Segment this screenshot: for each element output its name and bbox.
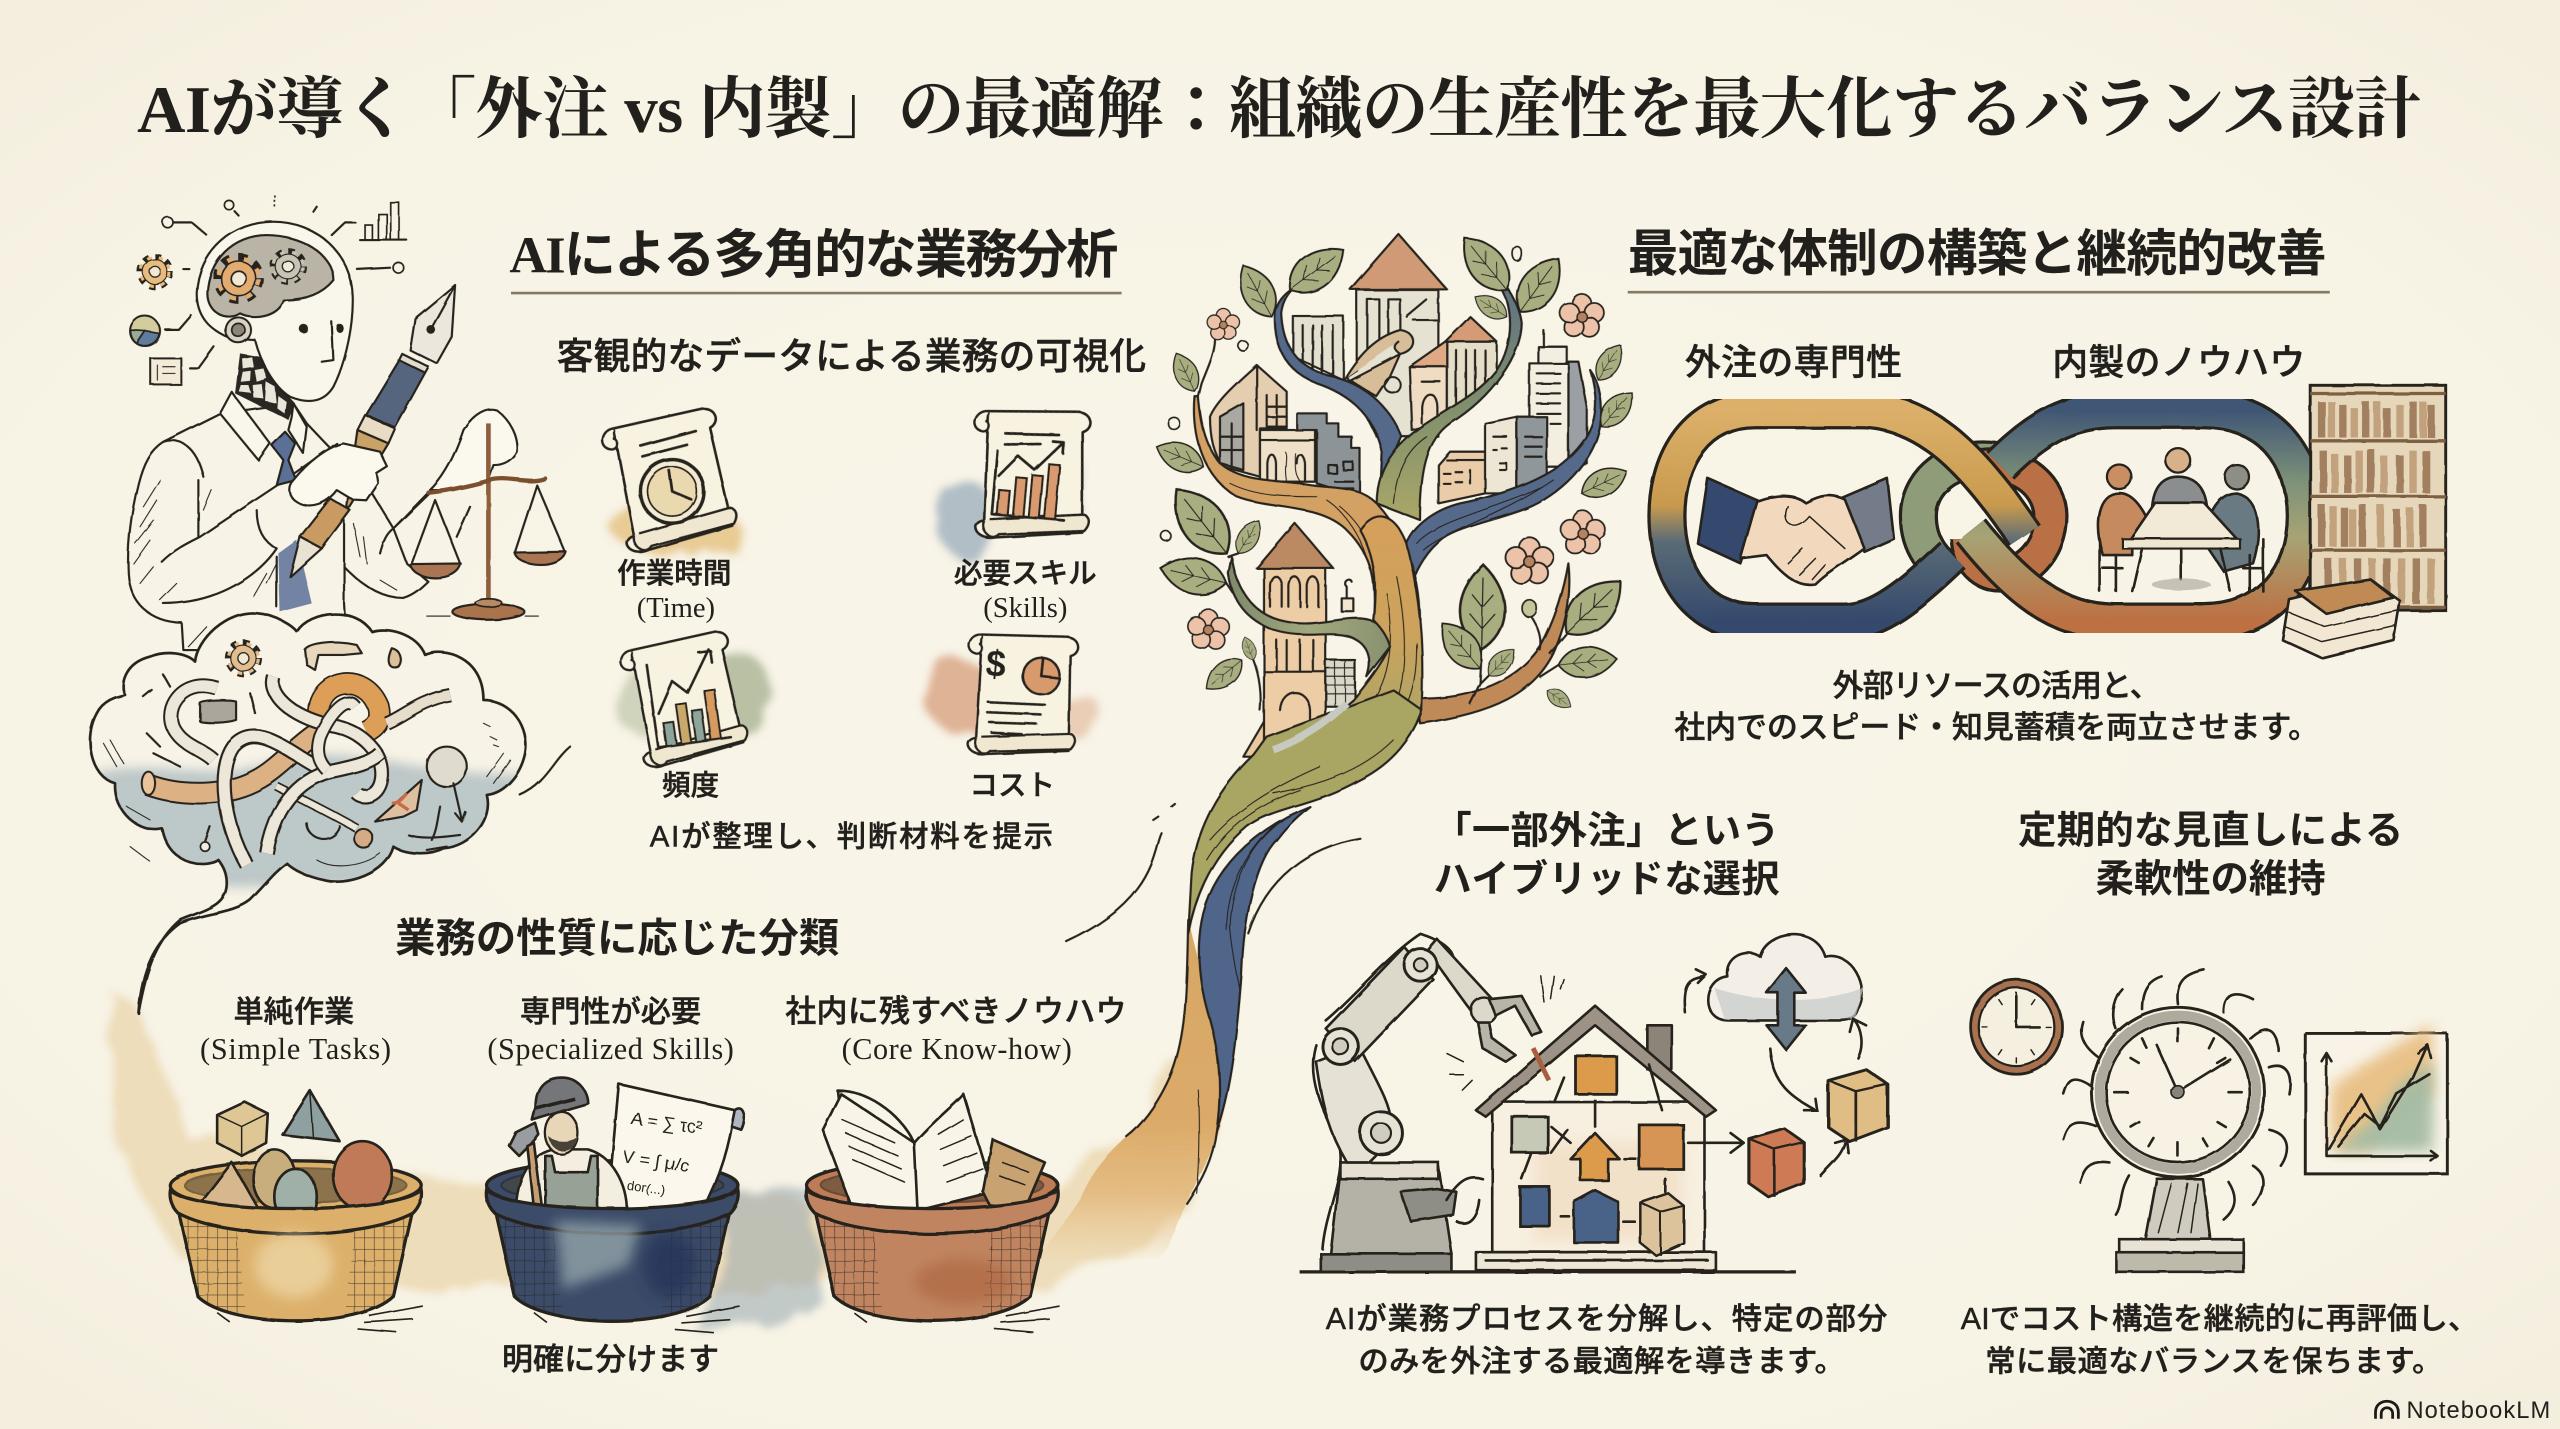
small stems — [1198, 340, 1567, 710]
pen — [290, 285, 455, 577]
heading: periodic review: 柔軟性の維持 — [2096, 858, 2326, 901]
shirt and arms — [128, 403, 470, 650]
caption: AI re-evaluates cost — [1961, 1302, 2478, 1378]
icon: navy basket with worker and formulas — [486, 1078, 744, 1332]
root strokes — [1067, 804, 1360, 1203]
label: outsourcing expertise: 外注の専門性 — [1685, 342, 1902, 383]
label: simple tasks: (Simple Tasks) — [200, 1032, 391, 1066]
icon: scroll cost — [958, 627, 1086, 764]
robot arm — [1300, 934, 1796, 1272]
label: required skills — [954, 558, 1097, 624]
icon: scroll cost: $ — [984, 642, 1008, 685]
brain with gears — [207, 235, 333, 343]
illustration: watercolor washes — [107, 454, 1216, 1326]
lower right brown branch — [1417, 563, 1569, 723]
hand on pen — [289, 443, 387, 505]
label: work time: 作業時間 — [617, 558, 731, 590]
lower left green branch — [1228, 557, 1390, 677]
cloud wash — [90, 754, 537, 887]
caption: AI decomposes processes: のみを外注する最適解を導きます。 — [1358, 1344, 1845, 1378]
illustration: tree with city — [1037, 227, 1641, 1260]
heading: partial outsourcing: 「一部外注」という — [1433, 809, 1780, 852]
label: work time: (Time) — [637, 593, 715, 624]
caption: outsourcing and in-house balance: 社内でのスピード・知見蓄積を両立させます。 — [1674, 710, 2319, 745]
head — [197, 222, 353, 401]
heading: classification: 業務の性質に応じた分類 — [395, 915, 839, 961]
blue right branch — [1407, 370, 1601, 580]
caption: AI organizes: AIが整理し、判断材料を提示 — [650, 821, 1053, 854]
caption: outsourcing and in-house balance — [1674, 668, 2319, 745]
illustration: large clock with swirl — [2064, 970, 2290, 1272]
illustration: interlocked infinity chain — [1667, 410, 2305, 622]
title: AIが導く「外注 vs 内製」の最適解：組織の生産性を最大化するバランス設計 — [137, 73, 2421, 147]
tangled ribbons — [142, 677, 450, 865]
cloud speech tail — [520, 747, 570, 795]
label: core know-how: (Core Know-how) — [842, 1032, 1072, 1066]
label: required skills: (Skills) — [983, 593, 1067, 624]
label: specialized skills: (Specialized Skills) — [487, 1032, 734, 1066]
label: simple tasks — [200, 995, 391, 1066]
heading: partial outsourcing: ハイブリッドな選択 — [1433, 857, 1780, 901]
caption: outsourcing and in-house balance: 外部リソースの活用と、 — [1833, 668, 2161, 703]
logo: NotebookLM: NotebookLM — [2407, 1398, 2550, 1424]
olive upper branch — [1377, 273, 1522, 520]
icon: navy basket with worker and formulas: dor(...) — [626, 1178, 666, 1198]
label: frequency: 頻度 — [662, 770, 719, 802]
house outline — [1476, 1006, 1716, 1270]
neck machinery — [235, 353, 295, 420]
caption: AI decomposes processes — [1326, 1302, 1887, 1378]
label: cost: コスト — [969, 770, 1055, 802]
scales of justice — [410, 409, 566, 620]
blue upper-left branch — [1275, 287, 1402, 487]
subheading: visualization: 客観的なデータによる業務の可視化 — [557, 336, 1146, 377]
face — [299, 322, 344, 362]
right skyscrapers — [1438, 330, 1587, 503]
illustration: robot analyst with pen and scales — [128, 195, 566, 650]
heading: periodic review — [2018, 809, 2403, 901]
icon: scroll frequency chart — [619, 629, 750, 770]
left building cluster — [1210, 365, 1360, 497]
blocks inside house — [1512, 1056, 1684, 1255]
icon: rust basket with books — [806, 1091, 1060, 1332]
icon: navy basket with worker and formulas: A = ∑ τc² — [630, 1108, 704, 1138]
heading: partial outsourcing — [1433, 809, 1780, 901]
heading: optimal structure: 最適な体制の構築と継続的改善 — [1628, 225, 2327, 282]
leaves — [1151, 227, 1641, 713]
icon: navy basket with worker and formulas: V = ∫ μ/c — [622, 1147, 690, 1176]
heading: multi-angle analysis: AIによる多角的な業務分析 — [509, 227, 1118, 285]
icon: scroll clock — [600, 406, 740, 555]
caption: AI decomposes processes: AIが業務プロセスを分解し、特定の部分 — [1326, 1302, 1887, 1336]
flowers and buds — [1161, 246, 1605, 649]
icon: yellow basket with shapes — [170, 1091, 423, 1332]
analysis icons floating around the head — [130, 195, 407, 384]
caption: AI re-evaluates cost: AIでコスト構造を継続的に再評価し、 — [1961, 1302, 2478, 1336]
trunk lower — [1037, 690, 1422, 1260]
lower tower — [1243, 523, 1355, 757]
icon: scroll skill chart — [965, 403, 1098, 546]
trunk upper — [1253, 516, 1422, 770]
icon: meeting at table — [2098, 448, 2263, 591]
icon: cost trend chart — [2305, 1025, 2447, 1174]
heading: periodic review: 定期的な見直しによる — [2018, 809, 2403, 852]
label: work time — [617, 558, 731, 624]
caption: AI re-evaluates cost: 常に最適なバランスを保ちます。 — [1985, 1344, 2442, 1378]
orange left branch — [1194, 397, 1420, 620]
label: in-house know-how: 内製のノウハウ — [2052, 342, 2305, 383]
label: simple tasks: 単純作業 — [234, 995, 354, 1029]
upper buildings — [1293, 234, 1497, 437]
label: specialized skills — [487, 995, 734, 1066]
icon: bookshelf and stacked books — [2282, 385, 2446, 658]
illustration: tangled thought cloud — [90, 613, 570, 1013]
label: specialized skills: 専門性が必要 — [520, 995, 701, 1029]
label: core know-how — [785, 994, 1127, 1066]
collar — [220, 392, 307, 460]
caption: clearly separate: 明確に分けます — [502, 1342, 719, 1377]
icon: handshake — [1698, 478, 1894, 585]
illustration: robot arm and house of blocks — [1300, 934, 1888, 1272]
cloud shape — [90, 613, 526, 1013]
label: core know-how: 社内に残すべきノウハウ — [785, 994, 1127, 1029]
swirl strokes — [2064, 970, 2290, 1220]
blocks, cloud and arrows outside house — [1684, 935, 1888, 1197]
tie — [272, 432, 312, 612]
label: required skills: 必要スキル — [954, 558, 1097, 590]
illustration: wall clock — [1971, 980, 2062, 1074]
cloud debris — [103, 643, 510, 866]
